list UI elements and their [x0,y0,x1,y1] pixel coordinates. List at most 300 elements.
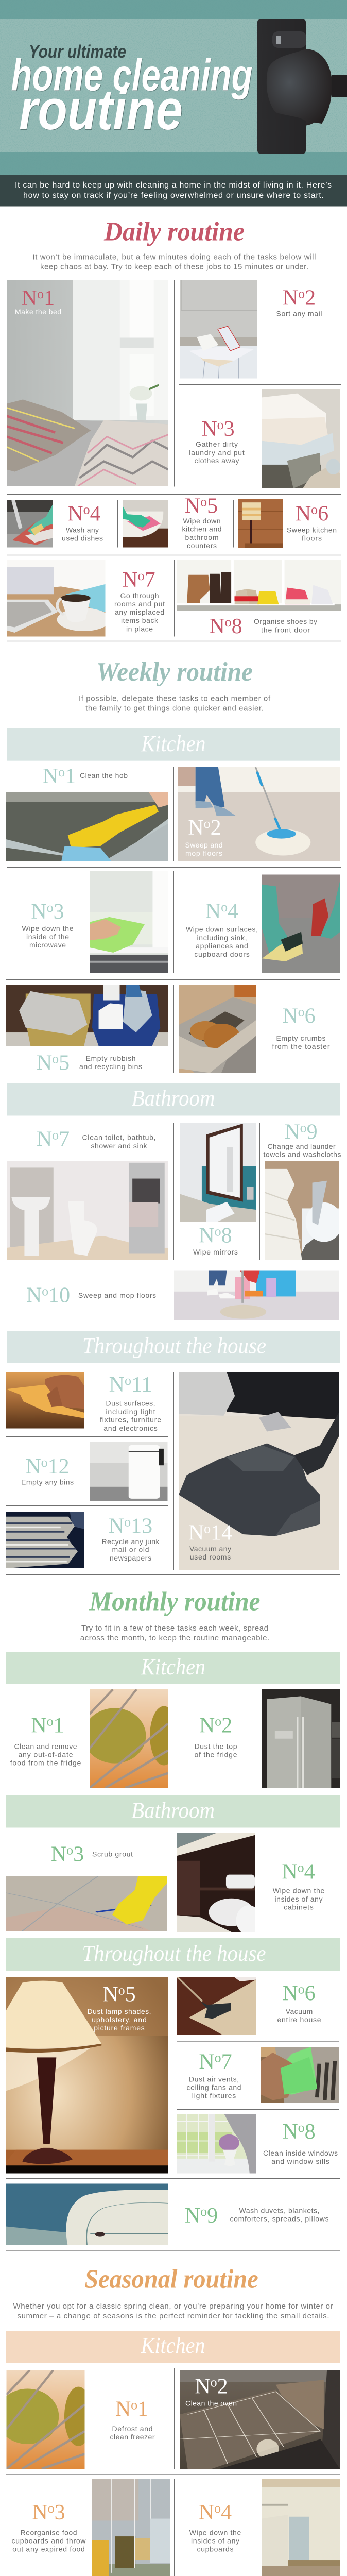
photo: bathroom mirror [180,1123,256,1222]
label [114,591,165,633]
label [22,924,74,949]
monthly task 9: wash duvets [6,2183,328,2245]
number: o [221,900,228,914]
daily task 7: put items back [7,560,165,637]
number: N [32,2501,48,2524]
label: Wipe down [183,517,220,525]
heading: seasonal routine: Whether you opt for a classic spring clean, or you’re preparing your home for winter or [13,2302,333,2311]
monthly task 3: scrub grout [6,1842,167,1931]
label: Reorganise food [21,2529,77,2537]
monthly task 4: wipe cabinets [177,1833,325,1935]
number: N [26,1284,42,1308]
daily task 6: sweep floors [238,499,337,548]
photo: recycling bins [6,985,168,1046]
label: Wash duvets, blankets, [239,2206,319,2214]
photo: towels and sink [265,1161,339,1260]
number: o [298,1860,304,1875]
number: o [47,900,54,915]
section band: seasonal kitchen: Kitchen [141,2333,205,2358]
number: 6 [305,1005,316,1028]
label: Wipe mirrors [193,1248,238,1256]
number: N [102,1982,118,2006]
label [189,440,245,465]
label: microwave [29,941,66,949]
photo: cabinet with towels [177,1833,255,1932]
photo: fridge freezer [262,1689,340,1788]
label: Organise shoes by [254,617,317,625]
label: comforters, spreads, pillows [230,2214,328,2223]
photo: microwave [90,871,168,973]
number: o [124,1515,131,1529]
label: Vacuum any [189,1545,231,1553]
label: and recycling bins [79,1062,142,1071]
number: 8 [305,2120,316,2144]
photo: shoes in cupboard [177,560,341,611]
number: N [31,900,47,924]
photo: mail [180,280,257,378]
weekly task 3: wipe microwave [22,871,168,973]
label [272,1034,330,1050]
label: Vacuum [286,2007,313,2015]
number: N [201,417,217,441]
seasonal task 4: wipe cupboards [189,2479,340,2576]
weekly task 13: recycle junk mail [6,1512,160,1568]
number: o [215,1224,221,1239]
intro band: It can be hard to keep up with cleaning a home in the midst of living in it. Here’s [15,181,332,190]
label: shower and sink [91,1142,147,1150]
daily task 5: wipe counters [123,495,221,550]
photo: bed [7,280,168,486]
number: o [48,2501,55,2516]
number: N [209,615,225,638]
title: routine [19,78,183,142]
number: o [83,502,90,517]
label: Wipe down the [22,924,74,933]
label [189,1545,231,1561]
label: Gather dirty [196,440,238,448]
label: Wash any [66,526,99,534]
number: o [298,1981,305,1997]
label: rooms and put [114,600,165,608]
label: cupboards and throw [11,2537,86,2545]
section band: weekly kitchen [7,728,340,761]
section band: seasonal kitchen [6,2331,340,2363]
number: o [58,765,65,779]
daily task 3: gather laundry [189,389,340,488]
intro band [0,175,347,206]
label [185,841,222,857]
number: N [284,1120,300,1144]
number: N [185,495,200,518]
number: N [185,2204,200,2228]
label: Make the bed [15,308,61,316]
label: picture frames [94,2024,145,2032]
weekly task 12: empty bins [21,1442,168,1501]
seasonal task 2: clean oven [180,2370,340,2469]
label: Clean toilet, bathtub, [82,1133,155,1142]
label: Wipe down the [189,2529,241,2537]
photo: table lamp [6,1977,168,2173]
number: 2 [305,286,316,310]
heading: monthly routine [80,1587,269,1642]
label [102,1537,160,1562]
heading: monthly routine: Monthly routine [89,1587,260,1617]
hero carpet background [0,0,347,175]
heading: daily routine: keep chaos at bay. Try to keep each of these jobs to 15 minutes or under. [40,263,308,271]
label: Clean inside windows [263,2149,338,2157]
photo: dusting with cloth [6,1372,84,1428]
label: from the toaster [272,1042,330,1050]
heading: monthly routine: Try to fit in a few of these tasks each week, spread [81,1624,268,1633]
number: N [199,1224,215,1248]
daily task 8: organise shoes [177,560,341,638]
label: newspapers [110,1554,151,1562]
label: including sink, [197,934,247,942]
section band: weekly throughout the house: Throughout the house [82,1333,266,1358]
number: o [47,1714,54,1729]
section band: monthly throughout the house [6,1938,340,1971]
label: Clean and remove [14,1742,77,1751]
number: o [131,2398,137,2412]
photo: gloves and spray [262,875,340,973]
label: clothes away [195,456,239,465]
heading: daily routine: Daily routine [103,217,245,246]
label: appliances and [196,942,248,950]
number: o [204,1521,211,1536]
label: of the fridge [195,1751,237,1759]
daily task 4: wash dishes [7,500,103,547]
number: o [298,286,305,301]
number: o [200,495,207,509]
number: o [298,1005,305,1019]
label: bathroom [185,533,218,541]
label: clean freezer [110,2433,155,2441]
label: ceiling fans and [186,2083,241,2092]
weekly task 11: dust surfaces [6,1372,161,1432]
weekly task 4: wipe surfaces [186,875,340,973]
number: 5 [125,1982,136,2006]
number: 2 [217,2375,228,2399]
photo: lamp on wood wall [238,499,283,548]
label: Dust surfaces, [106,1399,155,1408]
label: any out-of-date [19,1751,73,1759]
number: 2 [211,816,221,840]
number: o [225,615,232,630]
photo: folded laundry [262,389,340,488]
label: upholstery, and [92,2015,147,2024]
number: 6 [318,502,328,526]
number: 11 [131,1373,152,1397]
label: Empty rubbish [85,1054,136,1062]
seasonal task 1: defrost freezer [0,2370,155,2469]
label [186,925,258,958]
hero panel [0,0,347,175]
number: o [138,568,145,583]
label [110,2425,155,2441]
number: N [205,900,221,923]
label: Wipe down surfaces, [186,925,258,934]
label: towels and washcloths [264,1150,341,1158]
photo: toaster [179,985,256,1073]
label: Dust the top [195,1742,237,1751]
heading: weekly routine: If possible, delegate these tasks to each member of [79,694,271,703]
monthly task 6: vacuum entire house [177,1977,321,2035]
intro band: how to stay on track if you’re feeling overwhelmed or unsure where to start. [23,191,324,200]
label [263,2149,338,2165]
monthly task 7: dust air vents [186,2047,339,2103]
weekly task 10: sweep and mop floors [26,1270,339,1320]
number: o [217,417,224,432]
number: 3 [54,900,64,924]
label: Empty any bins [21,1478,74,1486]
label: Change and launder [268,1142,336,1150]
number: 1 [65,765,76,788]
weekly task 9: launder towels [264,1120,342,1260]
weekly task 5: empty bins [6,985,168,1075]
number: N [188,1521,204,1545]
label [287,526,337,542]
section band: monthly bathroom: Bathroom [131,1798,215,1823]
label: Go through [120,591,159,600]
photo: bathroom [7,1161,168,1260]
photo: mop [178,767,340,861]
number: o [215,1714,221,1729]
number: o [66,1842,73,1858]
label: Scrub grout [92,1850,133,1858]
label: Clean the hob [80,771,128,779]
heading: weekly routine [79,657,271,713]
label: insides of any [275,1895,322,1903]
label [264,1142,341,1158]
weekly task 6: empty toaster [179,985,330,1073]
section band: monthly kitchen: Kitchen [141,1654,205,1680]
number: N [22,286,37,310]
number: N [37,1127,52,1151]
weekly task 1: clean hob [6,765,168,861]
number: N [199,1714,215,1737]
label [186,2075,241,2100]
label [277,2007,321,2024]
label: Wipe down the [273,1887,325,1895]
number: o [214,2501,221,2516]
number: 9 [207,2204,218,2228]
heading: seasonal routine: Seasonal routine [84,2265,258,2294]
number: o [125,1373,131,1388]
section band: weekly throughout the house [7,1331,340,1363]
label: Empty crumbs [276,1034,325,1042]
label [11,2529,86,2553]
label: items back [121,616,159,624]
number: 7 [221,2050,232,2074]
number: 5 [207,495,218,518]
label: Sweep and mop floors [78,1291,156,1299]
icon: vacuum cleaner head [257,19,347,154]
label [273,1887,325,1911]
photo: scrubbing grout [6,1876,167,1931]
number: o [298,2120,305,2135]
photo: lemons in fridge [90,1689,168,1788]
heading: monthly routine: across the month, to keep the routine manageable. [80,1634,269,1642]
label: cupboard doors [194,950,250,958]
photo: stack of newspapers [6,1512,84,1568]
label: Recycle any junk [102,1537,160,1546]
number: N [51,1842,66,1866]
number: 2 [221,1714,232,1737]
number: o [42,1284,48,1298]
number: 12 [48,1455,70,1479]
number: 1 [44,286,55,310]
number: 4 [90,502,101,526]
label [195,1742,237,1759]
title: home cleaning [11,50,252,100]
number: 1 [54,1714,64,1737]
photo: window and vase [177,2114,256,2173]
photo: cup on table [7,560,105,637]
number: N [25,1455,41,1479]
number: o [52,1127,59,1143]
number: 5 [59,1051,70,1075]
number: o [211,2375,217,2389]
number: 3 [73,1842,84,1866]
label: Dust air vents, [189,2075,239,2083]
photo: washing dish [7,500,53,547]
number: 10 [48,1284,70,1308]
label: fixtures, furniture [100,1416,161,1424]
label [182,517,221,550]
photo: cleaning hob [6,792,168,861]
label: inside of the [26,933,69,941]
label [88,2007,151,2032]
label: out any expired food [12,2545,85,2553]
label: including light [106,1408,155,1416]
seasonal task 3: reorganise food cupboards [11,2479,170,2576]
section band: weekly kitchen: Kitchen [141,731,206,756]
heading: weekly routine: the family to get things done quicker and easier. [85,704,264,713]
section band: weekly bathroom [7,1083,340,1116]
number: 8 [221,1224,232,1248]
label: used rooms [190,1553,231,1561]
number: 8 [232,615,242,638]
number: N [43,765,58,788]
number: N [282,1981,298,2005]
label: food from the fridge [10,1759,81,1767]
number: o [311,502,318,517]
number: o [300,1120,307,1136]
label: floors [302,534,322,542]
label: the front door [261,625,310,634]
number: o [200,2204,207,2219]
number: 6 [305,1981,316,2005]
label: used dishes [62,534,103,542]
number: N [67,502,83,526]
weekly task 2: sweep and mop floors [178,767,340,861]
number: 7 [145,568,155,592]
label: in place [126,624,153,633]
label [254,617,317,634]
number: N [109,1515,124,1538]
label [230,2206,328,2223]
number: 9 [307,1120,318,1144]
weekly task 14: vacuum rooms [179,1372,339,1570]
label: kitchen and [182,524,221,533]
number: N [195,2375,211,2399]
number: N [188,816,204,840]
number: N [199,2050,215,2074]
number: o [118,1982,125,1998]
number: 3 [55,2501,65,2524]
number: o [37,286,44,301]
label: cupboards [197,2545,234,2553]
number: o [52,1051,59,1066]
label: mop floors [185,849,222,857]
section band: monthly throughout the house: Throughout the house [82,1941,266,1966]
label [100,1399,161,1432]
section band: monthly kitchen [6,1652,340,1684]
monthly task 5: dust lamp shades [6,1977,168,2173]
section band: monthly bathroom [6,1795,340,1828]
number: 7 [59,1127,70,1151]
photo: mop and cleaning supplies [174,1270,339,1320]
label: entire house [277,2015,321,2024]
monthly task 2: dust top of fridge [195,1689,340,1788]
photo: open cupboard [262,2479,340,2576]
number: N [115,2398,131,2421]
photo: lemons in freezer [6,2370,84,2469]
title [11,42,252,142]
photo: pedal bin [90,1442,168,1501]
heading: seasonal routine [13,2265,333,2320]
label: cabinets [284,1903,314,1911]
label: Clean the oven [185,2399,237,2407]
number: 1 [137,2398,148,2421]
monthly task 8: clean windows [177,2114,338,2173]
daily task 1: make the bed [7,280,168,486]
number: N [282,2120,298,2144]
number: 3 [224,417,235,441]
monthly task 1: clean fridge [10,1689,178,1788]
label [82,1133,155,1150]
photo: vacuum on rug [177,1977,256,2035]
number: N [296,502,311,526]
number: o [41,1455,48,1470]
label: Sweep kitchen [287,526,337,534]
photo: oven interior [180,2370,340,2469]
number: N [282,1860,298,1884]
heading: seasonal routine: summer – a change of seasons is the perfect reminder for tackling the small details. [18,2312,329,2320]
number: 4 [221,2501,232,2524]
heading: daily routine: It won’t be immaculate, but a few minutes doing each of the tasks below will [33,252,316,262]
number: N [31,1714,47,1737]
section band: weekly bathroom: Bathroom [132,1086,215,1111]
heading: daily routine [33,217,316,271]
label: laundry and put [189,448,245,456]
label: counters [187,541,217,550]
photo: vacuum on carpet [179,1372,339,1570]
label: Dust lamp shades, [88,2007,151,2015]
photo: wiping bowl [123,500,168,547]
label: and window sills [271,2157,329,2165]
label: any misplaced [115,608,164,616]
label: insides of any [191,2537,239,2545]
label: light fixtures [192,2092,236,2100]
label [62,526,103,542]
number: N [122,568,138,592]
photo: storage jars [92,2479,170,2576]
number: 4 [228,900,238,923]
label: Defrost and [112,2425,152,2433]
number: o [215,2050,221,2065]
number: 14 [211,1521,232,1545]
